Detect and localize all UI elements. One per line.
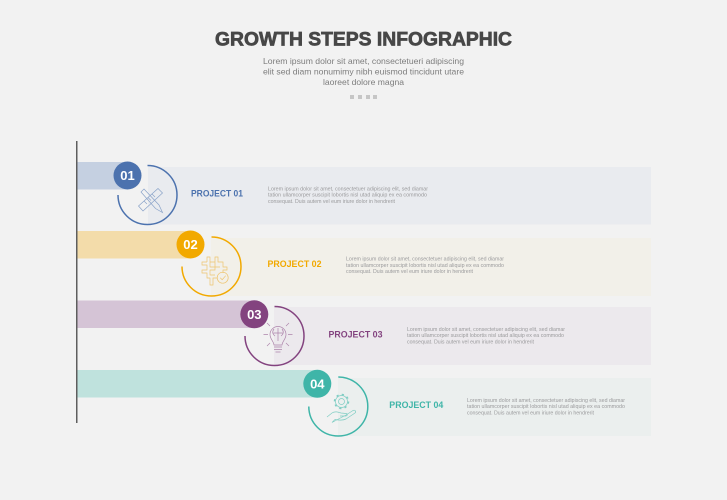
- description 04: tation ullamcorper suscipit lobortis nisl utad aliquip ex ea commodo: [467, 404, 625, 410]
- ring 01: [118, 166, 177, 224]
- bar 01: [77, 162, 127, 190]
- ring 02: [182, 237, 241, 296]
- icon: ruler and pencil: [138, 188, 162, 212]
- number 03: 03: [247, 307, 262, 322]
- description 01: [268, 186, 428, 205]
- panel: project 02: [77, 230, 651, 296]
- description 01: Lorem ipsum dolor sit amet, consectetuer adipiscing elit, sed diamar: [268, 186, 428, 192]
- bar 02: [77, 231, 190, 258]
- number 04: 04: [310, 376, 325, 392]
- bar 04: [77, 370, 317, 398]
- badge 03: [240, 300, 268, 328]
- panel: project 04: [77, 370, 651, 436]
- description 02: tation ullamcorper suscipit lobortis nisl utad aliquip ex ea commodo: [346, 263, 504, 269]
- description 03: tation ullamcorper suscipit lobortis nisl utad aliquip ex ea commodo: [407, 333, 564, 339]
- vertical axis line: [76, 141, 78, 423]
- badge 02: [176, 230, 204, 258]
- description 03: consequat. Duis autem vel eum iriure dolor in hendrerit: [407, 340, 535, 346]
- number 02: 02: [183, 237, 198, 252]
- panel 04 background: [338, 378, 651, 436]
- ring 04: [309, 377, 368, 436]
- description 02: [346, 256, 504, 275]
- description 02: consequat. Duis autem vel eum iriure dolor in hendrerit: [346, 269, 474, 275]
- badge 01: [114, 162, 142, 190]
- panel 02 background: [211, 238, 651, 296]
- decorative dots: [350, 95, 377, 99]
- panel 01 background: [148, 167, 651, 224]
- panel 03 background: [274, 307, 651, 365]
- subtitle: elit sed diam nonumimy nibh euismod tincidunt utare: [263, 66, 464, 76]
- icon: hand and gear: [327, 394, 356, 422]
- description 02: Lorem ipsum dolor sit amet, consectetuer adipiscing elit, sed diamar: [346, 256, 504, 262]
- subtitle: [263, 56, 464, 87]
- heading 03: PROJECT 03: [328, 330, 382, 340]
- subtitle: Lorem ipsum dolor sit amet, consectetueri adipiscing: [263, 56, 464, 66]
- description 01: consequat. Duis autem vel eum iriure dolor in hendrerit: [268, 199, 396, 205]
- description 03: [407, 327, 565, 346]
- description 04: [467, 398, 625, 416]
- heading 02: PROJECT 02: [268, 259, 322, 270]
- panel: project 03: [77, 300, 651, 366]
- title: GROWTH STEPS INFOGRAPHIC: [215, 30, 512, 50]
- number 01: 01: [120, 168, 135, 183]
- description 04: Lorem ipsum dolor sit amet, consectetuer adipiscing elit, sed diamar: [467, 398, 625, 404]
- description 03: Lorem ipsum dolor sit amet, consectetuer adipiscing elit, sed diamar: [407, 327, 565, 333]
- icon: puzzle and check: [202, 257, 228, 285]
- description 01: tation ullamcorper suscipit lobortis nisl utad aliquip ex ea commodo: [268, 192, 427, 198]
- heading 01: PROJECT 01: [191, 188, 244, 200]
- heading 04: PROJECT 04: [389, 400, 444, 411]
- icon: light bulb: [264, 323, 292, 352]
- bar 03: [77, 300, 254, 328]
- subtitle: laoreet dolore magna: [323, 77, 404, 87]
- badge 04: [303, 370, 331, 398]
- panel: project 01: [77, 162, 651, 224]
- ring 03: [245, 306, 304, 366]
- description 04: consequat. Duis autem vel eum iriure dolor in hendrerit: [467, 410, 595, 416]
